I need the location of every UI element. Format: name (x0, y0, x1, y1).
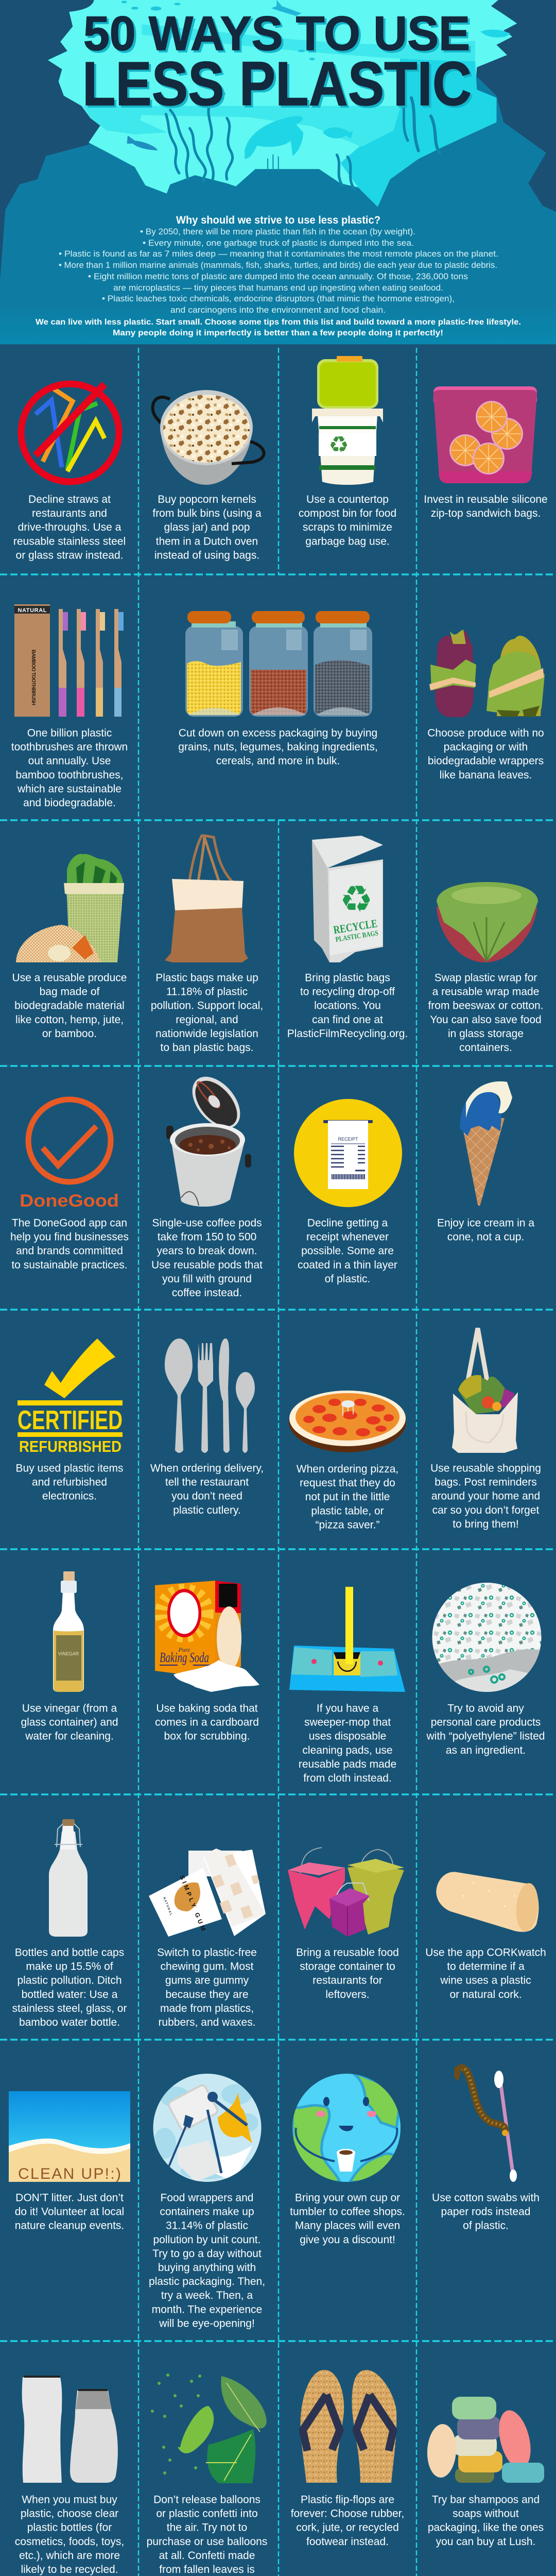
icon: receipt on yellow circle (294, 1099, 402, 1207)
icon: DoneGood logo (20, 1099, 119, 1211)
text: tip 19: to bring them! (453, 1518, 519, 1530)
text: tip 33: from fallen leaves is (159, 2564, 255, 2575)
text: tip 9: to ban plastic bags. (161, 1042, 253, 1054)
icon: certified refurbished stamp (18, 1338, 123, 1455)
panel: tip 29 food wrappers (149, 2074, 265, 2329)
title: 50 WAYS TO USE (83, 6, 470, 60)
intro text block: • Plastic is found as far as 7 miles deep — meaning that it contaminates the most remote places on the planet. (59, 249, 498, 259)
text: tip 2: instead of using bags. (154, 549, 259, 561)
intro text block (36, 214, 521, 337)
text: tip 17: tell the restaurant (165, 1477, 249, 1488)
icon: clean up beach: CLEAN UP!:) (18, 2165, 121, 2182)
header illustration: ocean splash (0, 0, 556, 344)
text: tip 1: drive-throughs. Use a (18, 521, 121, 533)
text: tip 30: give you a discount! (300, 2234, 395, 2246)
panel: tip 2 popcorn (152, 390, 264, 561)
panel: tip 28 litter (9, 2091, 130, 2232)
icon: compost bin: ♻ (328, 432, 349, 458)
text: tip 25: chewing gum. Most (161, 1961, 254, 1973)
panel: tip 9 tote (151, 836, 263, 1054)
text: tip 22: If you have a (317, 1702, 378, 1715)
icon: pink bag with oranges (433, 386, 537, 483)
panel: tip 35 shampoo bars (426, 2397, 544, 2548)
text: tip 12: and brands committed (16, 1245, 123, 1257)
panel: tip 27 cork (425, 1872, 546, 2001)
icon: cork flip-flops (301, 2370, 396, 2483)
text: tip 12: to sustainable practices. (11, 1259, 128, 1271)
panel: tip 5 toothbrushes (11, 604, 128, 809)
text: tip 21: box for scrubbing. (164, 1731, 250, 1742)
text: tip 29: 31.14% of plastic (166, 2220, 248, 2232)
text: tip 29: Try to go a day without (152, 2248, 262, 2260)
icon: plastic-free chewing gum pack: SIMPLY GUM (178, 1874, 207, 1932)
title: LESS PLASTIC (84, 50, 474, 121)
text: tip 10: can find one at (312, 1014, 383, 1026)
text: tip 5: out annually. Use (28, 755, 111, 767)
text: tip 14: possible. Some are (301, 1245, 394, 1257)
text: tip 30: tumbler to coffee shops. (290, 2206, 405, 2218)
text: tip 32: cosmetics, foods, toys, (15, 2536, 124, 2548)
text: tip 3: scraps to minimize (303, 521, 392, 533)
panel: tip 24 bottle (12, 1819, 127, 2028)
text: tip 28: nature cleanup events. (15, 2220, 124, 2232)
text: tip 24: plastic pollution. Ditch (17, 1975, 122, 1987)
text: tip 24: bottled water: Use a (22, 1989, 118, 2001)
icon: receipt on yellow circle: RECEIPT (338, 1137, 358, 1142)
icon: vinegar bottle: VINEGAR (58, 1651, 79, 1656)
text: tip 21: Use baking soda that (156, 1702, 258, 1715)
panel: tip 7 produce wrappers (427, 630, 545, 781)
text: tip 35: Try bar shampoos and (432, 2494, 540, 2506)
icon: baking soda box: Pure (178, 1646, 190, 1653)
text: tip 9: Plastic bags make up (155, 972, 258, 984)
text: tip 2: glass jar) and pop (164, 521, 250, 533)
text: tip 17: When ordering delivery, (150, 1462, 264, 1475)
intro text block: • By 2050, there will be more plastic than fish in the ocean (by weight). (140, 227, 415, 236)
text: tip 11: containers. (459, 1042, 512, 1054)
text: tip 14: receipt whenever (306, 1231, 389, 1243)
text: tip 11: in glass storage (448, 1028, 524, 1040)
panel: tip 22 mop (289, 1587, 405, 1784)
text: tip 25: gums are gummy (165, 1975, 249, 1987)
text: tip 11: a reusable wrap made (432, 986, 539, 998)
panel: tip 8 produce bag (12, 854, 127, 1040)
text: tip 27: Use the app CORKwatch (425, 1946, 546, 1959)
panel: tip 15 ice cream (437, 1081, 534, 1243)
text: tip 15: cone, not a cup. (447, 1231, 524, 1243)
icon: sweeper mop (289, 1587, 405, 1692)
text: tip 18: When ordering pizza, (297, 1463, 398, 1475)
icon: wrapped produce (429, 630, 545, 718)
panel: tip 11 beeswax wrap (428, 882, 544, 1054)
icon: certified refurbished stamp: REFURBISHED (19, 1437, 121, 1455)
intro text block: and carcinogens into the environment and food chain. (170, 305, 386, 315)
text: tip 1: or glass straw instead. (16, 549, 123, 561)
panel: tip 13 coffee pod (151, 1067, 263, 1299)
icon: reusable coffee pod (166, 1067, 251, 1207)
text: tip 14: of plastic. (325, 1273, 370, 1285)
text: tip 29: buying anything with (158, 2262, 256, 2274)
title (82, 6, 474, 121)
text: tip 29: Food wrappers and (161, 2192, 253, 2204)
text: tip 19: bags. Post reminders (435, 1477, 537, 1488)
text: tip 10: Bring plastic bags (305, 972, 390, 984)
text: tip 19: Use reusable shopping (430, 1462, 541, 1475)
text: tip 27: to determine if a (447, 1961, 525, 1973)
text: tip 35: packaging, like the ones (428, 2522, 544, 2534)
icon: plastic-free chewing gum pack (149, 1849, 266, 1937)
text: tip 29: plastic packaging. Then, (149, 2276, 265, 2287)
text: tip 32: etc.), which are more (19, 2550, 120, 2562)
icon: recycle plastic bags box: ♻ (340, 877, 373, 921)
icon: DoneGood logo: DoneGood (20, 1191, 119, 1211)
panel: tip 3 compost (299, 356, 396, 547)
text: tip 20: glass container) and (21, 1717, 118, 1728)
text: tip 2: from bulk bins (using a (152, 507, 262, 519)
text: tip 23: as an ingredient. (446, 1744, 526, 1756)
icon: smiling earth with coffee (292, 2071, 402, 2182)
panel: tip 25 gum (149, 1849, 266, 2028)
intro text block: Many people doing it imperfectly is better than a few people doing it perfectly! (113, 329, 443, 337)
text: tip 34: Plastic flip-flops are (301, 2494, 394, 2506)
text: tip 3: Use a countertop (306, 494, 389, 505)
icon: baking soda box: Baking Soda (160, 1650, 209, 1665)
icon: recycle plastic bags box: PLASTIC BAGS (335, 929, 379, 944)
title: 50 WAYS TO USE (85, 8, 472, 62)
icon: recycle plastic bags box: RECYCLE (333, 917, 378, 936)
intro text block: • Plastic leaches toxic chemicals, endocrine disruptors (that mimic the hormone estrogen), (102, 294, 455, 303)
text: tip 18: “pizza saver.” (316, 1519, 379, 1531)
text: tip 2: them in a Dutch oven (156, 535, 258, 547)
text: tip 9: regional, and (176, 1014, 238, 1026)
text: tip 6: grains, nuts, legumes, baking ingredients, (178, 741, 378, 753)
text: tip 33: at all. Confetti made (159, 2550, 255, 2562)
text: tip 10: to recycling drop-off (300, 986, 395, 998)
text: tip 34: forever: Choose rubber, (291, 2508, 404, 2520)
icon: plastic-free chewing gum pack: NATURAL (162, 1897, 172, 1916)
panel: tip 30 own cup (290, 2071, 405, 2246)
icon: compost bin (312, 356, 383, 485)
text: tip 7: Choose produce with no (427, 727, 544, 739)
icon: three bulk jars (185, 611, 372, 717)
icon: vinegar bottle (53, 1571, 84, 1692)
text: tip 16: Buy used plastic items (16, 1462, 123, 1475)
icon: certified refurbished stamp: CERTIFIED (18, 1405, 123, 1435)
icon: pepperoni pizza (289, 1391, 406, 1452)
panel: tip 20 vinegar (21, 1571, 118, 1742)
text: tip 35: soaps without (453, 2508, 519, 2520)
text: tip 26: leftovers. (325, 1989, 370, 2001)
text: tip 26: storage container to (300, 1961, 395, 1973)
text: tip 13: years to break down. (157, 1245, 257, 1257)
icon: canvas tote bag (165, 836, 248, 962)
text: tip 5: One billion plastic (27, 727, 112, 739)
text: tip 25: made from plastics, (160, 2003, 254, 2014)
text: tip 18: plastic table, or (311, 1505, 384, 1517)
text: tip 16: electronics. (42, 1490, 97, 1502)
text: tip 5: which are sustainable (17, 783, 121, 795)
text: tip 15: Enjoy ice cream in a (437, 1217, 534, 1229)
icon: shampoo bars stack (426, 2397, 544, 2483)
text: tip 24: make up 15.5% of (26, 1961, 113, 1973)
icon: microbeads magnified (432, 1583, 542, 1692)
icon: seahorse and cotton swab (454, 2063, 517, 2182)
text: tip 11: You can also save food (430, 1014, 542, 1026)
text: tip 12: The DoneGood app can (12, 1217, 127, 1229)
text: tip 23: personal care products (431, 1717, 541, 1728)
text: tip 9: pollution. Support local, (151, 1000, 263, 1012)
text: tip 13: Single-use coffee pods (152, 1217, 262, 1229)
text: tip 19: car so you don’t forget (432, 1504, 540, 1516)
icon: mesh produce bags (16, 854, 124, 962)
text: tip 25: Switch to plastic-free (157, 1946, 257, 1959)
panel: tip 33 leaves (147, 2374, 267, 2576)
text: tip 30: Bring your own cup or (295, 2192, 400, 2204)
text: tip 32: likely to be recycled. (21, 2564, 118, 2575)
text: tip 23: with “polyethylene” listed (426, 1731, 545, 1742)
text: tip 34: cork, jute, or recycled (296, 2522, 399, 2534)
text: tip 19: around your home and (431, 1490, 540, 1502)
panel: tip 26 takeout boxes (288, 1848, 404, 2001)
text: tip 8: Use a reusable produce (12, 972, 127, 984)
text: tip 16: and refurbished (32, 1477, 107, 1488)
text: tip 24: Bottles and bottle caps (15, 1946, 124, 1959)
icon: bamboo toothbrushes: BAMBOO TOOTHBRUSH (30, 650, 36, 705)
text: tip 5: bamboo toothbrushes, (16, 769, 123, 781)
text: tip 14: Decline getting a (307, 1217, 388, 1229)
panel: tip 1 straws (13, 384, 126, 561)
icon: clean up beach (9, 2091, 130, 2182)
text: tip 23: Try to avoid any (447, 1702, 524, 1715)
text: tip 14: coated in a thin layer (298, 1259, 397, 1271)
panel: tip 34 flip-flops (291, 2370, 404, 2548)
text: tip 29: month. The experience (152, 2303, 262, 2315)
text: tip 22: from cloth instead. (303, 1772, 392, 1784)
text: tip 33: the air. Try not to (167, 2522, 247, 2534)
text: tip 25: rubbers, and waxes. (158, 2016, 256, 2028)
text: tip 10: locations. You (314, 1000, 381, 1012)
icon: wine cork (436, 1872, 540, 1933)
intro text block: • More than 1 million marine animals (mammals, fish, sharks, turtles, and birds) die each year due to plastic debris. (59, 260, 497, 270)
text: tip 1: reusable stainless steel (13, 535, 126, 547)
text: tip 21: comes in a cardboard (155, 1717, 259, 1728)
text: tip 8: or bamboo. (42, 1028, 97, 1040)
panel: tip 14 receipt (294, 1099, 402, 1285)
text: tip 35: you can buy at Lush. (436, 2536, 535, 2548)
text: tip 6: Cut down on excess packaging by buying (179, 727, 377, 739)
text: tip 32: plastic, choose clear (21, 2508, 118, 2520)
icon: cutlery (165, 1338, 255, 1453)
panel: tip 23 microbeads (426, 1583, 545, 1756)
text: tip 3: garbage bag use. (305, 535, 390, 547)
icon: pot of popcorn (153, 390, 264, 485)
panel: tip 31 cotton swabs (432, 2063, 540, 2232)
text: tip 11: from beeswax or cotton. (428, 1000, 544, 1012)
text: tip 32: plastic bottles (for (27, 2522, 112, 2534)
title: LESS PLASTIC (82, 48, 472, 118)
text: tip 30: Many places will even (295, 2220, 400, 2232)
text: tip 12: help you find businesses (10, 1231, 129, 1243)
text: tip 9: 11.18% of plastic (166, 986, 248, 998)
text: tip 29: pollution by unit count. (153, 2234, 260, 2246)
icon: reusable bag of groceries (452, 1328, 518, 1453)
text: tip 29: will be eye-opening! (159, 2317, 255, 2329)
text: tip 13: coffee instead. (172, 1287, 242, 1299)
text: tip 31: paper rods instead (441, 2206, 530, 2218)
text: tip 31: Use cotton swabs with (432, 2192, 540, 2204)
text: tip 24: stainless steel, glass, or (12, 2003, 127, 2014)
text: tip 7: biodegradable wrappers (428, 755, 544, 767)
panel: tip 21 baking soda (155, 1581, 259, 1742)
icon: baking soda box (155, 1581, 259, 1692)
panel: tip 17 cutlery (150, 1338, 264, 1516)
text: tip 31: of plastic. (463, 2220, 509, 2232)
text: tip 13: you fill with ground (162, 1273, 252, 1285)
panel: tip 18 pizza (289, 1391, 406, 1531)
text: tip 28: do it! Volunteer at local (15, 2206, 124, 2218)
text: tip 13: Use reusable pods that (151, 1259, 263, 1271)
text: tip 29: containers make up (160, 2206, 254, 2218)
intro text block: Why should we strive to use less plastic? (176, 214, 380, 226)
text: tip 11: Swap plastic wrap for (435, 972, 537, 984)
panel: tip 4 silicone bag (424, 386, 548, 519)
text: tip 3: compost bin for food (299, 507, 396, 519)
text: tip 1: Decline straws at (28, 494, 111, 505)
text: tip 26: Bring a reusable food (296, 1946, 399, 1959)
icon: plastic waste and fish (153, 2074, 262, 2183)
icon: recycle plastic bags box (312, 836, 383, 962)
panel: tip 6 bulk jars (178, 611, 378, 767)
icon: glass swing-top bottle (49, 1819, 88, 1937)
text: tip 4: zip-top sandwich bags. (431, 507, 541, 519)
text: tip 22: sweeper-mop that (304, 1717, 391, 1728)
icon: fallen leaves confetti (151, 2374, 267, 2483)
text: tip 25: because they are (165, 1989, 249, 2001)
text: tip 8: like cotton, hemp, jute, (15, 1014, 124, 1026)
text: tip 17: plastic cutlery. (173, 1504, 241, 1516)
text: tip 7: packaging or with (444, 741, 528, 753)
icon: takeout boxes (288, 1848, 404, 1937)
intro text block: We can live with less plastic. Start small. Choose some tips from this list and build toward a more plastic-free lifestyle. (36, 318, 521, 327)
text: tip 2: Buy popcorn kernels (158, 494, 256, 505)
panel: tip 19 shopping bag (430, 1328, 541, 1530)
text: tip 27: wine uses a plastic (440, 1975, 531, 1987)
text: tip 34: footwear instead. (306, 2536, 389, 2548)
icon: two plastic bottles (22, 2376, 118, 2483)
text: tip 7: like banana leaves. (440, 769, 532, 781)
icon: bamboo toothbrushes: NATURAL (18, 607, 47, 614)
text: tip 9: nationwide legislation (155, 1028, 258, 1040)
text: tip 13: take from 150 to 500 (158, 1231, 256, 1243)
text: tip 20: water for cleaning. (25, 1731, 114, 1742)
panel: tip 16 refurbished (16, 1338, 123, 1502)
text: tip 22: uses disposable (309, 1731, 386, 1742)
text: tip 4: Invest in reusable silicone (424, 494, 548, 505)
text: tip 27: or natural cork. (449, 1989, 522, 2001)
panel: tip 32 clear bottles (15, 2376, 124, 2575)
text: tip 26: restaurants for (312, 1975, 383, 1987)
panel: tip 10 bag recycling (287, 836, 408, 1040)
text: tip 29: try a week. Then, a (161, 2290, 253, 2301)
text: tip 33: Don’t release balloons (153, 2494, 260, 2506)
intro text block: are microplastics — tiny pieces that humans end up ingesting when eating seafood. (113, 283, 443, 293)
icon: wave ice cream cone (460, 1081, 512, 1206)
text: tip 10: PlasticFilmRecycling.org. (287, 1028, 408, 1040)
text: tip 28: DON’T litter. Just don’t (15, 2192, 124, 2204)
text: tip 8: bag made of (40, 986, 100, 998)
text: tip 5: toothbrushes are thrown (11, 741, 128, 753)
text: tip 33: or plastic confetti into (156, 2508, 258, 2520)
text: tip 20: Use vinegar (from a (22, 1702, 117, 1715)
text: tip 8: biodegradable material (14, 1000, 125, 1012)
panel: tip 12 DoneGood (10, 1099, 129, 1271)
text: tip 33: purchase or use balloons (147, 2536, 267, 2548)
intro text block: • Eight million metric tons of plastic are dumped into the ocean annually. Of those, 236,000 tons (88, 272, 468, 281)
text: tip 18: request that they do (300, 1477, 395, 1489)
text: tip 17: you don’t need (171, 1490, 242, 1502)
text: tip 1: restaurants and (32, 507, 107, 519)
icon: wrapped bowl (437, 882, 538, 962)
text: tip 24: bamboo water bottle. (19, 2016, 120, 2028)
text: tip 5: and biodegradable. (23, 797, 116, 809)
icon: crossed out straws (21, 384, 119, 482)
text: tip 22: cleaning pads, use (302, 1744, 393, 1756)
text: tip 32: When you must buy (22, 2494, 117, 2506)
intro text block: • Every minute, one garbage truck of plastic is dumped into the sea. (143, 238, 414, 248)
text: tip 22: reusable pads made (299, 1758, 396, 1770)
icon: bamboo toothbrushes (14, 604, 124, 717)
text: tip 6: cereals, and more in bulk. (216, 755, 340, 767)
text: tip 18: not put in the little (305, 1491, 390, 1503)
